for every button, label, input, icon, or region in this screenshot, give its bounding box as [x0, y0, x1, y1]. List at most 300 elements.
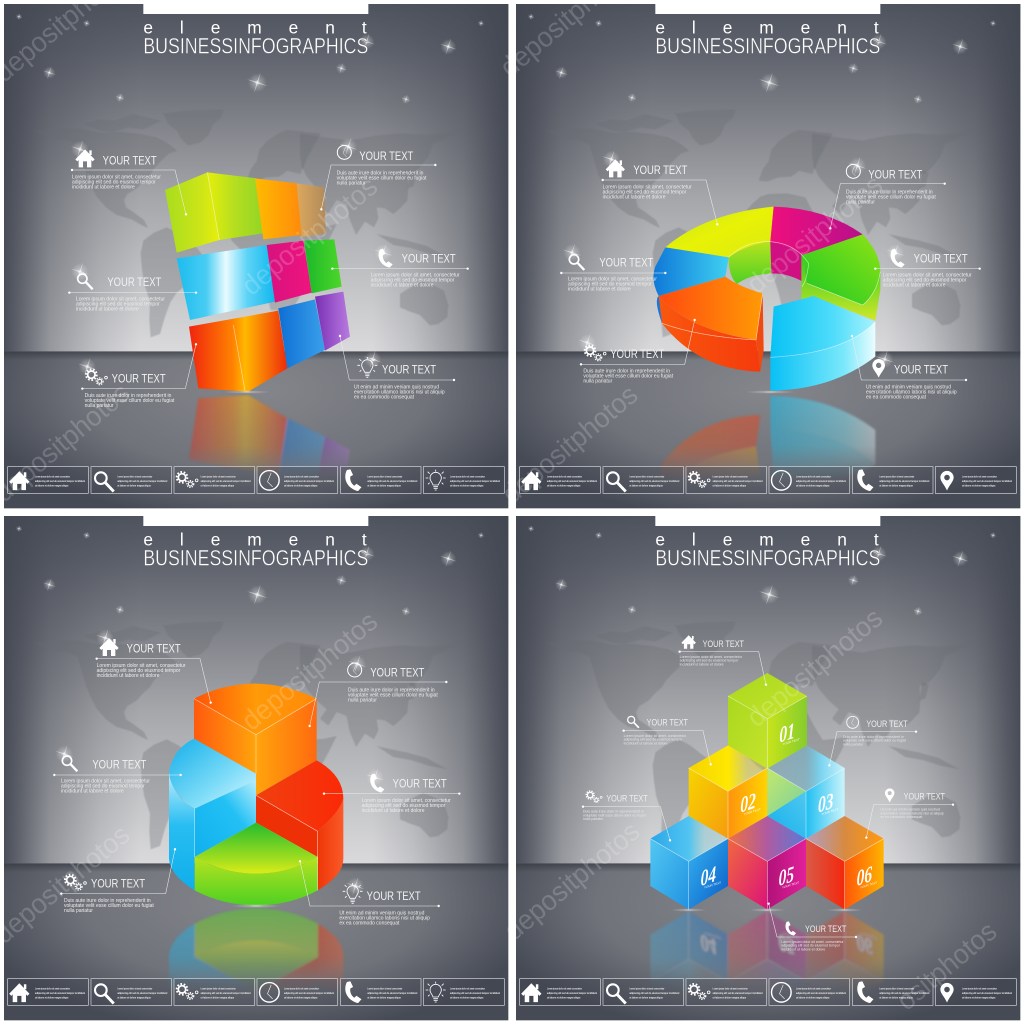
- panel background with world map: [4, 4, 508, 508]
- icon: pin: [872, 347, 897, 378]
- bottom icon bar: adipiscing elit sed do eiusmod tempor incididunt: [201, 479, 251, 483]
- body text: ex ea commodo consequat: [339, 921, 400, 927]
- leader line: [324, 793, 459, 795]
- base glow: [745, 390, 795, 394]
- body text: adipiscing elit sed do eiusmod tempor: [76, 302, 160, 308]
- bottom icon bar: Lorem ipsum dolor sit amet consectetur: [796, 474, 832, 478]
- cubes 04 to 06: [650, 816, 884, 909]
- bottom icon bar: Lorem ipsum dolor sit amet consectetur: [117, 474, 153, 478]
- callout: pin: [866, 788, 953, 838]
- panel background with world map: [4, 516, 508, 1020]
- bottom icon bar: adipiscing elit sed do eiusmod tempor incididunt: [547, 991, 597, 995]
- body text: incididunt ut labore et dolore: [883, 283, 946, 289]
- bottom icon bar: ut labore et dolore magna aliqua: [629, 484, 663, 488]
- heading: YOUR TEXT: [866, 719, 908, 729]
- heading: YOUR TEXT: [703, 639, 744, 649]
- bottom icon bar: ut labore et dolore magna aliqua: [367, 996, 401, 1000]
- bottom icon bar: ut labore et dolore magna aliqua: [35, 484, 69, 488]
- bottom icon bar: Lorem ipsum dolor sit amet consectetur: [962, 474, 998, 478]
- bottom icon bar: adipiscing elit sed do eiusmod tempor incididunt: [796, 479, 846, 483]
- icon: phone: [883, 240, 908, 268]
- panel background with world map: [516, 516, 1020, 1020]
- leader line: [340, 336, 454, 380]
- callout: gears: [575, 320, 695, 385]
- body text: voluptate velit esse cillum dolor eu fugiat: [843, 739, 906, 743]
- chart: cube pyramid: [650, 673, 884, 909]
- diagonal stock-photo marks present in the reference: depositphotos: [741, 169, 888, 300]
- body text: adipiscing elit sed do eiusmod tempor: [61, 784, 145, 790]
- cube 01: [728, 673, 807, 769]
- title tab: [143, 512, 368, 526]
- panel: donut chart: [516, 0, 1020, 510]
- heading: YOUR TEXT: [805, 924, 847, 934]
- bottom icon bar: ut labore et dolore magna aliqua: [796, 484, 830, 488]
- icon: home: [681, 635, 696, 649]
- bottom icon bar: Lorem ipsum dolor sit amet consectetur: [201, 474, 236, 478]
- body text: Duis aute irure dolor in reprehenderit in: [348, 687, 435, 693]
- cube 02: [689, 745, 767, 839]
- body text: exercitation ullamco laboris nisi ut aliquip: [880, 811, 944, 815]
- bottom icon bar: adipiscing elit sed do eiusmod tempor incididunt: [713, 991, 763, 995]
- body text: Lorem ipsum dolor sit amet, consectetur: [72, 175, 161, 181]
- body text: Duis aute irure dolor in reprehenderit in: [64, 898, 151, 904]
- bottom icon bar: adipiscing elit sed do eiusmod tempor incididunt: [284, 991, 334, 995]
- body text: voluptate velit esse cillum dolor eu fugiat: [85, 398, 175, 404]
- bottom icon bar: ut labore et dolore magna aliqua: [547, 484, 581, 488]
- bottom icon bar: Lorem ipsum dolor sit amet consectetur: [547, 474, 583, 478]
- callout: search: [624, 716, 711, 764]
- heading: YOUR TEXT: [393, 776, 447, 790]
- leader line: [61, 849, 175, 894]
- title: BUSINESSINFOGRAPHICS: [655, 545, 880, 570]
- body text: Lorem ipsum dolor sit amet, consectetur: [568, 277, 657, 283]
- bottom icon bar: Lorem ipsum dolor sit amet consectetur: [35, 474, 71, 478]
- bottom icon bar: Lorem ipsum dolor sit amet consectetur: [796, 986, 832, 990]
- bottom icon bar: Lorem ipsum dolor sit amet consectetur: [201, 986, 236, 990]
- cube 03: 03: [818, 789, 834, 818]
- leader line: [769, 904, 856, 937]
- bottom icon bar: ut labore et dolore magna aliqua: [284, 484, 318, 488]
- leader line: [69, 292, 196, 294]
- chart reflection: [662, 395, 876, 475]
- leader line: [583, 807, 670, 840]
- body text: nulla pariatur: [583, 817, 604, 821]
- body text: adipiscing elit sed do eiusmod tempor: [781, 944, 841, 948]
- callout: gears: [61, 849, 175, 914]
- title: element: [143, 529, 367, 549]
- heading: YOUR TEXT: [112, 371, 166, 385]
- bottom icon bar: Lorem ipsum dolor sit amet consectetur: [713, 474, 748, 478]
- icon: clock: [845, 153, 870, 178]
- panel: stacked pie cylinder: [4, 512, 508, 1020]
- body text: Ut enim ad minim veniam quis nostrud: [866, 384, 951, 390]
- title: [655, 17, 880, 58]
- callout: search: [52, 741, 181, 795]
- body text: incididunt ut labore et dolore: [72, 185, 135, 191]
- icon: gears: [586, 791, 602, 802]
- body text: incididunt ut labore et dolore: [61, 789, 124, 795]
- bottom icon bar: adipiscing elit sed do eiusmod tempor incididunt: [117, 991, 167, 995]
- body text: ex ea commodo consequat: [880, 815, 922, 819]
- leader line: [72, 170, 186, 214]
- cube 06: 06: [857, 863, 872, 892]
- bottom icon bar: Lorem ipsum dolor sit amet consectetur: [284, 474, 320, 478]
- body text: nulla pariatur: [843, 742, 864, 746]
- base glows: [670, 908, 863, 912]
- body text: ex ea commodo consequat: [866, 394, 927, 400]
- body text: Lorem ipsum dolor sit amet, consectetur: [61, 779, 150, 785]
- cube 01: YOUR TEXT: [783, 737, 800, 746]
- heading: YOUR TEXT: [402, 251, 456, 265]
- leader line: [82, 344, 196, 389]
- bottom icon bar: Lorem ipsum dolor sit amet consectetur: [713, 986, 748, 990]
- body text: incididunt ut labore et dolore: [624, 741, 668, 745]
- bottom icon bar: Lorem ipsum dolor sit amet consectetur: [117, 986, 153, 990]
- cube 05: YOUR TEXT: [782, 881, 799, 890]
- callout: home: [93, 625, 211, 703]
- icon: gears: [65, 875, 86, 890]
- bottom icon bar: ut labore et dolore magna aliqua: [629, 996, 663, 1000]
- body text: incididunt ut labore et dolore: [362, 808, 425, 814]
- diagonal stock-photo marks present in the reference: ositphotos: [891, 915, 1002, 1016]
- icon: bulb: [343, 873, 368, 903]
- bottom icon bar: adipiscing elit sed do eiusmod tempor incididunt: [35, 991, 85, 995]
- bottom icon bar: Lorem ipsum dolor sit amet consectetur: [450, 474, 486, 478]
- icon: search: [52, 741, 77, 771]
- body text: adipiscing elit sed do eiusmod tempor: [97, 668, 181, 674]
- bottom icon bar: ut labore et dolore magna aliqua: [450, 996, 484, 1000]
- heading: YOUR TEXT: [868, 167, 923, 181]
- callout: search: [559, 240, 665, 293]
- heading: YOUR TEXT: [103, 153, 157, 167]
- bottom icon bar: adipiscing elit sed do eiusmod tempor incididunt: [629, 991, 679, 995]
- heading: YOUR TEXT: [367, 889, 421, 903]
- bottom icon bar: adipiscing elit sed do eiusmod tempor incididunt: [629, 479, 679, 483]
- callout: gears: [583, 791, 670, 840]
- body text: voluptate velit esse cillum dolor eu fugiat: [846, 194, 936, 200]
- callout: clock: [829, 716, 916, 765]
- icon: clock: [345, 651, 370, 677]
- body text: nulla pariatur: [846, 199, 875, 205]
- heading: YOUR TEXT: [914, 251, 968, 265]
- heading: YOUR TEXT: [359, 149, 414, 163]
- bottom icon bar: ut labore et dolore magna aliqua: [879, 996, 913, 1000]
- leader line: [852, 336, 966, 380]
- icon: clock: [336, 134, 361, 159]
- body text: Duis aute irure dolor in reprehenderit in: [583, 369, 670, 375]
- icon: bulb: [357, 347, 385, 377]
- title: element: [143, 17, 367, 37]
- body text: Ut enim ad minim veniam quis nostrud: [339, 911, 425, 917]
- callout: phone: [769, 904, 856, 951]
- leader line: [310, 682, 446, 726]
- body text: nulla pariatur: [64, 908, 93, 914]
- leader line: [680, 652, 766, 685]
- leader line: [332, 268, 468, 270]
- body text: adipiscing elit sed do eiusmod tempor: [371, 278, 455, 284]
- body text: Lorem ipsum dolor sit amet, consectetur: [781, 940, 844, 944]
- leader line: [54, 774, 181, 776]
- leader line: [97, 659, 211, 703]
- bottom icon bar: [8, 467, 504, 493]
- body text: Lorem ipsum dolor sit amet, consectetur: [624, 734, 687, 738]
- body text: incididunt ut labore et dolore: [680, 662, 724, 666]
- callout: clock: [310, 651, 446, 726]
- icon: search: [67, 259, 93, 289]
- heading: YOUR TEXT: [599, 256, 654, 270]
- bottom icon bar: Lorem ipsum dolor sit amet consectetur: [547, 986, 583, 990]
- diagonal stock-photo marks present in the reference: depositphotos: [741, 602, 888, 733]
- icon: gears: [75, 354, 107, 385]
- bottom icon bar: adipiscing elit sed do eiusmod tempor incididunt: [796, 991, 846, 995]
- cube 01: 01: [779, 719, 795, 748]
- body text: adipiscing elit sed do eiusmod tempor: [680, 659, 739, 663]
- cube 04: [650, 816, 728, 909]
- body text: Duis aute irure dolor in reprehenderit in: [846, 189, 933, 195]
- heading: YOUR TEXT: [610, 347, 665, 361]
- title: BUSINESSINFOGRAPHICS: [655, 33, 880, 58]
- body text: ex ea commodo consequat: [354, 394, 415, 400]
- bottom icon bar: adipiscing elit sed do eiusmod tempor incididunt: [117, 479, 167, 483]
- leader line: [875, 268, 980, 270]
- bottom icon bar: ut labore et dolore magna aliqua: [284, 996, 318, 1000]
- icon: phone: [362, 765, 388, 793]
- bottom icon bar: Lorem ipsum dolor sit amet consectetur: [367, 474, 403, 478]
- bottom icon bar: Lorem ipsum dolor sit amet consectetur: [450, 986, 486, 990]
- heading: YOUR TEXT: [370, 666, 425, 680]
- bottom icon bar: ut labore et dolore magna aliqua: [201, 996, 234, 1000]
- icon: clock: [847, 716, 859, 728]
- body text: Lorem ipsum dolor sit amet, consectetur: [883, 273, 972, 279]
- bottom icon bar: ut labore et dolore magna aliqua: [796, 996, 830, 1000]
- heading: YOUR TEXT: [647, 718, 688, 728]
- leader line: [603, 180, 717, 224]
- bottom icon bar: adipiscing elit sed do eiusmod tempor incididunt: [547, 479, 597, 483]
- heading: YOUR TEXT: [127, 642, 181, 656]
- body text: adipiscing elit sed do eiusmod tempor: [72, 180, 156, 186]
- chart reflection: [650, 911, 884, 984]
- heading: YOUR TEXT: [91, 876, 146, 890]
- heading: YOUR TEXT: [92, 758, 147, 772]
- body text: incididunt ut labore et dolore: [603, 194, 666, 200]
- title: BUSINESSINFOGRAPHICS: [143, 33, 368, 58]
- chart: cube wall: [165, 172, 350, 392]
- body text: voluptate velit esse cillum dolor eu fugiat: [348, 692, 438, 698]
- body text: adipiscing elit sed do eiusmod tempor: [624, 738, 683, 742]
- leader line: [581, 320, 695, 364]
- chart reflection: [188, 394, 350, 472]
- bottom icon bar: Lorem ipsum dolor sit amet consectetur: [35, 986, 71, 990]
- cube 04: 04: [701, 863, 716, 892]
- body text: Duis aute irure dolor in reprehenderit in: [85, 393, 172, 399]
- title tab: [655, 512, 880, 526]
- bottom icon bar: [8, 979, 504, 1005]
- bottom icon bar: ut labore et dolore magna aliqua: [117, 996, 151, 1000]
- cube 06: YOUR TEXT: [860, 881, 877, 890]
- cube 05: 05: [779, 863, 794, 892]
- title: [655, 529, 880, 570]
- body text: Lorem ipsum dolor sit amet, consectetur: [371, 273, 460, 279]
- heading: YOUR TEXT: [633, 163, 688, 177]
- bottom icon bar: ut labore et dolore magna aliqua: [367, 484, 401, 488]
- bottom icon bar: adipiscing elit sed do eiusmod tempor incididunt: [713, 479, 763, 483]
- chart: donut: [653, 207, 880, 391]
- body text: incididunt ut labore et dolore: [76, 307, 139, 313]
- base glow: [223, 390, 270, 394]
- body text: incididunt ut labore et dolore: [97, 673, 160, 679]
- icon: gears: [575, 330, 606, 361]
- leader line: [624, 731, 711, 764]
- bottom icon bar: adipiscing elit sed do eiusmod tempor incididunt: [35, 479, 85, 483]
- title tab: [655, 0, 880, 14]
- bottom icon bar: ut labore et dolore magna aliqua: [547, 996, 581, 1000]
- body text: exercitation ullamco laboris nisi ut aliquip: [339, 916, 430, 922]
- panel background with world map: [516, 4, 1020, 508]
- bottom icon bar: ut labore et dolore magna aliqua: [713, 996, 746, 1000]
- body text: Lorem ipsum dolor sit amet, consectetur: [97, 663, 186, 669]
- bottom icon bar: ut labore et dolore magna aliqua: [450, 484, 484, 488]
- bottom icon bar: adipiscing elit sed do eiusmod tempor incididunt: [879, 479, 929, 483]
- bottom icon bar: [520, 979, 1016, 1005]
- bottom icon bar: Lorem ipsum dolor sit amet consectetur: [629, 986, 665, 990]
- body text: Lorem ipsum dolor sit amet, consectetur: [76, 297, 165, 303]
- leader line: [829, 732, 916, 765]
- diagonal stock-photo marks present in the reference: depositphotos: [498, 815, 646, 946]
- heading: YOUR TEXT: [894, 363, 949, 377]
- title: BUSINESSINFOGRAPHICS: [143, 545, 368, 570]
- cube 03: [767, 745, 845, 839]
- bottom icon bar: ut labore et dolore magna aliqua: [117, 484, 151, 488]
- leader line: [300, 861, 439, 906]
- bottom icon bar: ut labore et dolore magna aliqua: [35, 996, 69, 1000]
- leader line: [321, 165, 435, 209]
- bottom icon bar: adipiscing elit sed do eiusmod tempor incididunt: [879, 991, 929, 995]
- bottom icon bar: ut labore et dolore magna aliqua: [962, 996, 996, 1000]
- icon: search: [559, 240, 585, 270]
- bottom icon bar: Lorem ipsum dolor sit amet consectetur: [879, 986, 915, 990]
- body text: adipiscing elit sed do eiusmod tempor: [362, 803, 446, 809]
- leader line: [561, 272, 665, 274]
- bottom icon bar: adipiscing elit sed do eiusmod tempor incididunt: [284, 479, 334, 483]
- diagonal stock-photo marks present in the reference: depositphotos: [496, 379, 644, 510]
- panel: cube pyramid: [516, 512, 1020, 1020]
- body text: incididunt ut labore et dolore: [371, 283, 434, 289]
- body text: Lorem ipsum dolor sit amet, consectetur: [603, 184, 692, 190]
- callout: phone: [875, 240, 980, 289]
- bottom icon bar: ut labore et dolore magna aliqua: [713, 484, 746, 488]
- callout: clock: [830, 153, 945, 228]
- callout: clock: [321, 134, 435, 209]
- callout: phone: [324, 765, 459, 814]
- title: element: [655, 529, 879, 549]
- body text: Duis aute irure dolor in reprehenderit in: [337, 170, 424, 176]
- body text: incididunt ut labore et dolore: [781, 947, 825, 951]
- bottom icon bar: adipiscing elit sed do eiusmod tempor incididunt: [367, 991, 417, 995]
- diagonal stock-photo marks present in the reference: depositphotos: [236, 170, 383, 301]
- bottom icon bar: adipiscing elit sed do eiusmod tempor incididunt: [367, 479, 417, 483]
- body text: incididunt ut labore et dolore: [568, 287, 631, 293]
- body text: nulla pariatur: [85, 403, 114, 409]
- bottom icon bar: adipiscing elit sed do eiusmod tempor incididunt: [450, 991, 500, 995]
- heading: YOUR TEXT: [107, 275, 162, 289]
- body text: nulla pariatur: [583, 379, 613, 385]
- body text: voluptate velit esse cillum dolor eu fugiat: [64, 903, 154, 909]
- title tab: [143, 0, 368, 14]
- heading: YOUR TEXT: [606, 794, 648, 804]
- title: element: [655, 17, 879, 37]
- chart reflection: [169, 909, 343, 992]
- chart: stacked cylinder: [169, 684, 343, 905]
- cube 02: 02: [740, 789, 756, 818]
- cube 05: [728, 816, 806, 909]
- icon: home: [93, 625, 119, 656]
- body text: Ut enim ad minim veniam quis nostrud: [354, 384, 439, 390]
- body text: Lorem ipsum dolor sit amet, consectetur: [362, 798, 451, 804]
- body text: nulla pariatur: [337, 180, 366, 186]
- leader line: [830, 184, 945, 228]
- bottom icon bar: Lorem ipsum dolor sit amet consectetur: [629, 474, 665, 478]
- cube 06: [806, 816, 884, 909]
- callout: bulb: [300, 861, 439, 927]
- body text: voluptate velit esse cillum dolor eu fugiat: [337, 175, 427, 181]
- base glow: [231, 904, 281, 908]
- callout: bulb: [340, 336, 454, 400]
- bottom icon bar: Lorem ipsum dolor sit amet consectetur: [367, 986, 403, 990]
- bottom icon bar: ut labore et dolore magna aliqua: [962, 484, 996, 488]
- callout: gears: [75, 344, 196, 409]
- callout: search: [67, 259, 196, 313]
- body text: voluptate velit esse cillum dolor eu fugiat: [583, 813, 646, 817]
- body text: adipiscing elit sed do eiusmod tempor: [603, 189, 687, 195]
- callout: pin: [852, 336, 966, 400]
- callout: phone: [332, 240, 468, 289]
- bottom icon bar: Lorem ipsum dolor sit amet consectetur: [879, 474, 915, 478]
- body text: Ut enim ad minim veniam quis nostrud: [880, 808, 940, 812]
- title: [143, 17, 368, 58]
- bottom icon bar: [520, 467, 1016, 493]
- body text: exercitation ullamco laboris nisi ut aliquip: [354, 389, 445, 395]
- cube 02: YOUR TEXT: [744, 807, 761, 816]
- diagonal stock-photo marks present in the reference: depositphotos: [236, 605, 383, 736]
- title: [143, 529, 368, 570]
- bottom icon bar: Lorem ipsum dolor sit amet consectetur: [284, 986, 320, 990]
- icon: home with sparkle: [67, 137, 95, 167]
- bottom icon bar: ut labore et dolore magna aliqua: [879, 484, 913, 488]
- callout: home: [67, 137, 186, 214]
- bottom icon bar: adipiscing elit sed do eiusmod tempor incididunt: [201, 991, 251, 995]
- body text: voluptate velit esse cillum dolor eu fugiat: [583, 374, 674, 380]
- callout: home: [599, 147, 717, 224]
- body text: Duis aute irure dolor in reprehenderit in: [583, 810, 644, 814]
- cube 03: YOUR TEXT: [821, 807, 838, 816]
- heading: YOUR TEXT: [904, 792, 945, 802]
- heading: YOUR TEXT: [382, 363, 437, 377]
- icon: pin: [885, 788, 894, 802]
- icon: phone: [371, 240, 396, 268]
- body text: adipiscing elit sed do eiusmod tempor: [883, 278, 967, 284]
- icon: phone: [786, 921, 796, 936]
- body text: nulla pariatur: [348, 697, 377, 703]
- icon: search: [628, 716, 639, 728]
- leader line: [866, 805, 953, 838]
- bottom icon bar: adipiscing elit sed do eiusmod tempor incididunt: [450, 479, 500, 483]
- body text: Lorem ipsum dolor sit amet, consectetur: [680, 655, 743, 659]
- bottom icon bar: Lorem ipsum dolor sit amet consectetur: [962, 986, 998, 990]
- panel: cube wall: [4, 0, 508, 508]
- body text: adipiscing elit sed do eiusmod tempor: [568, 282, 652, 288]
- cube 04: YOUR TEXT: [704, 881, 721, 890]
- bottom icon bar: ut labore et dolore magna aliqua: [201, 484, 234, 488]
